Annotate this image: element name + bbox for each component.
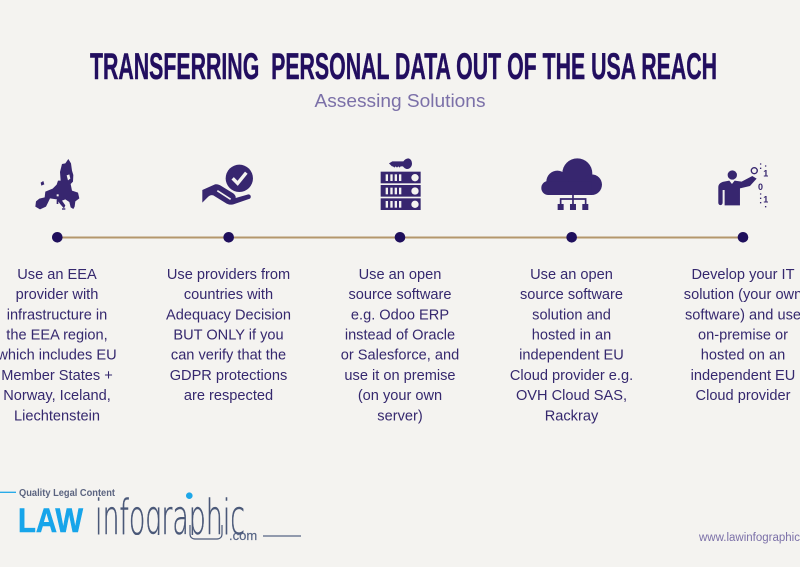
- logo: Law Infographic: infographic: [95, 490, 245, 546]
- icon: EU map: [35, 159, 79, 210]
- text: open source on premise: [341, 267, 459, 424]
- text: own IT solution: independent EU: [691, 368, 795, 384]
- text: own IT solution: Cloud provider: [696, 388, 791, 404]
- icon: hand with check mark: [202, 165, 253, 205]
- text: own IT solution: solution (your own: [684, 287, 800, 303]
- icon: person with binary data: 0: [758, 182, 763, 192]
- text: open source EU cloud: Use an open: [530, 267, 613, 283]
- text: EEA provider: Member States +: [1, 368, 113, 384]
- text: open source EU cloud: OVH Cloud SAS,: [516, 388, 627, 404]
- text: open source EU cloud: Cloud provider e.g.: [510, 368, 633, 384]
- text: EEA provider: provider with: [16, 287, 98, 303]
- icon: server with key: [381, 158, 421, 210]
- icon: person with binary data: 1: [763, 195, 768, 205]
- text: own IT solution: on-premise or: [698, 328, 788, 344]
- subtitle: Assessing Solutions: [314, 91, 486, 111]
- icon: cloud network: [541, 158, 602, 210]
- text: EEA provider: infrastructure in: [7, 308, 107, 324]
- text: open source EU cloud: hosted in an: [532, 328, 611, 344]
- text: open source on premise: or Salesforce, and: [341, 348, 459, 364]
- timeline: [52, 232, 748, 243]
- text: own IT solution: [684, 267, 800, 404]
- text: adequacy decision: are respected: [184, 388, 273, 404]
- text: open source EU cloud: independent EU: [519, 348, 624, 364]
- text: open source EU cloud: source software: [520, 287, 623, 303]
- text: open source EU cloud: [510, 267, 633, 424]
- text: open source on premise: use it on premise: [344, 368, 456, 384]
- text: EEA provider: Liechtenstein: [14, 408, 100, 424]
- text: open source on premise: source software: [348, 287, 452, 303]
- text: open source on premise: Use an open: [359, 267, 441, 283]
- logo: Law Infographic: LAW: [18, 502, 83, 540]
- text: adequacy decision: GDPR protections: [170, 368, 287, 384]
- text: own IT solution: software) and use: [685, 308, 800, 324]
- text: EEA provider: which includes EU: [0, 348, 117, 364]
- text: adequacy decision: Use providers from: [167, 267, 290, 283]
- icon: person with binary data: [718, 163, 768, 208]
- text: open source EU cloud: solution and: [532, 308, 611, 324]
- text: open source on premise: instead of Oracle: [345, 328, 455, 344]
- logo: Law Infographic: [0, 488, 301, 540]
- text: adequacy decision: Adequacy Decision: [166, 308, 291, 324]
- text: open source EU cloud: Rackray: [545, 408, 599, 424]
- text: adequacy decision: countries with: [184, 287, 273, 303]
- text: own IT solution: Develop your IT: [691, 267, 795, 283]
- logo: Law Infographic: .com: [229, 528, 257, 543]
- text: own IT solution: hosted on an: [701, 348, 785, 364]
- icon: person with binary data: 1: [763, 169, 768, 179]
- text: EEA provider: Use an EEA: [17, 267, 97, 283]
- text: EEA provider: [0, 267, 117, 424]
- logo: Law Infographic: Quality Legal Content: [19, 488, 116, 499]
- text: open source on premise: server): [377, 408, 423, 424]
- text: open source on premise: (on your own: [358, 388, 442, 404]
- text: adequacy decision: can verify that the: [171, 348, 286, 364]
- text: EEA provider: the EEA region,: [6, 328, 108, 344]
- text: EEA provider: Norway, Iceland,: [3, 388, 111, 404]
- text: open source on premise: e.g. Odoo ERP: [351, 308, 449, 324]
- text: adequacy decision: BUT ONLY if you: [173, 328, 284, 344]
- text: adequacy decision: [166, 267, 291, 404]
